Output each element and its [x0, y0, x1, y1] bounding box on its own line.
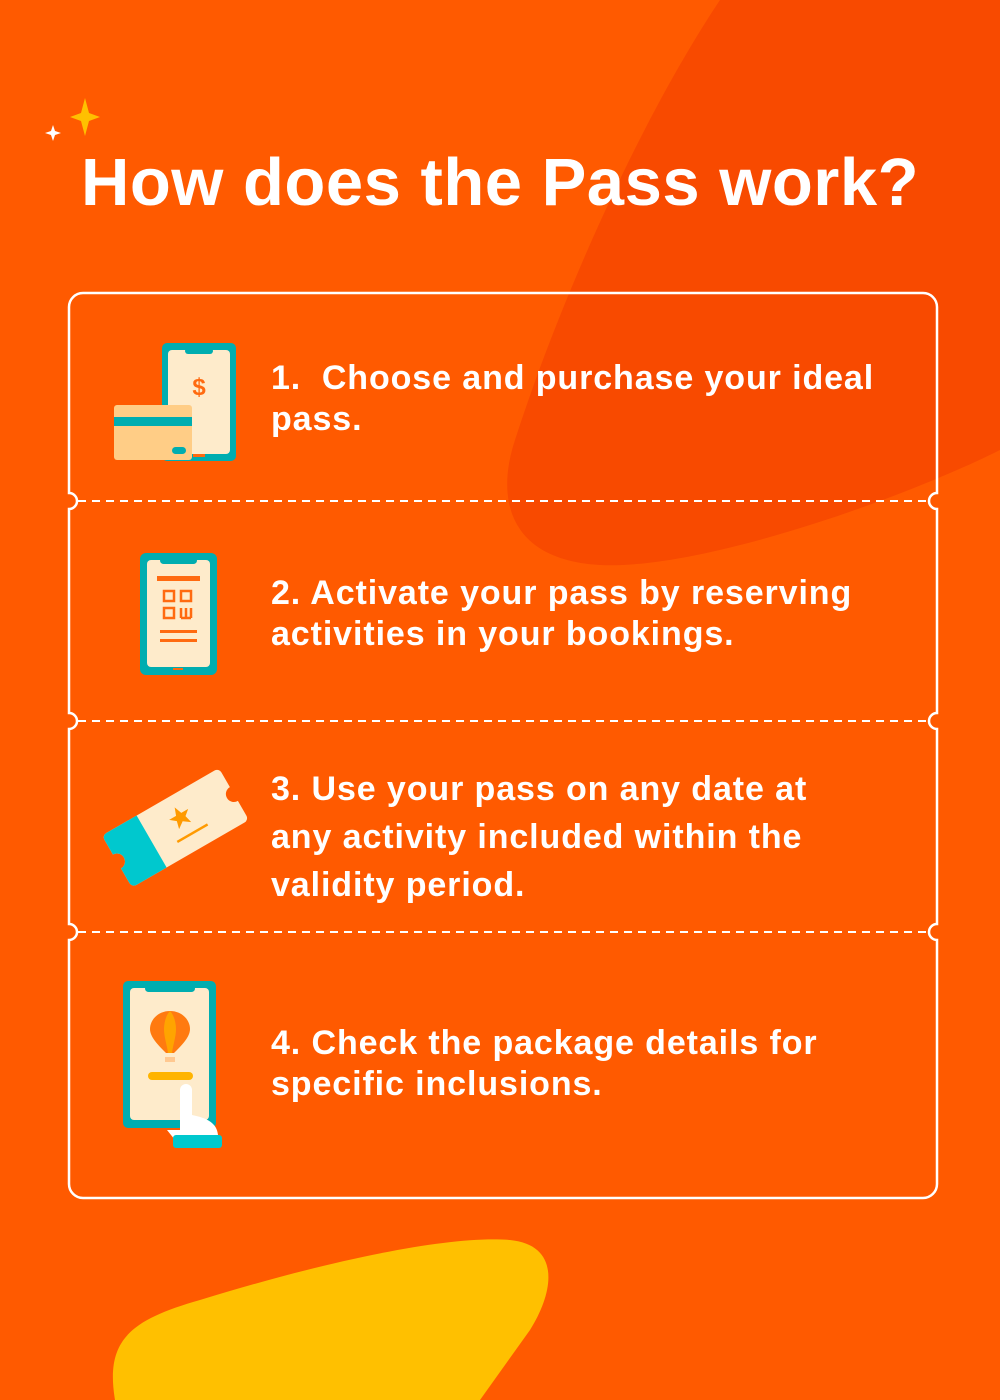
text: step 1: pass. [271, 400, 362, 438]
text: step 2: activities in your bookings. [271, 615, 735, 653]
text: step 3: any activity included within the [271, 818, 802, 856]
title: How does the Pass work? [81, 145, 919, 220]
icon: ticket [104, 770, 248, 886]
text: step 4: 4. Check the package details for [271, 1024, 818, 1062]
text: step 1 [271, 359, 874, 438]
icon: phone and card [114, 343, 236, 461]
text: step 4 [271, 1024, 818, 1103]
text: step 2 [271, 574, 852, 653]
icon: phone with QR [140, 553, 217, 675]
text: step 3 [271, 770, 807, 904]
text: step 1: 1. Choose and purchase your ideal [271, 359, 874, 397]
text: step 2: 2. Activate your pass by reserving [271, 574, 852, 612]
text: step 3: 3. Use your pass on any date at [271, 770, 807, 808]
icon: phone and card: $ [192, 374, 206, 401]
text: step 3: validity period. [271, 866, 525, 904]
text: step 4: specific inclusions. [271, 1065, 603, 1103]
icon: sparkles [45, 98, 100, 141]
icon: phone with balloon [123, 981, 222, 1148]
